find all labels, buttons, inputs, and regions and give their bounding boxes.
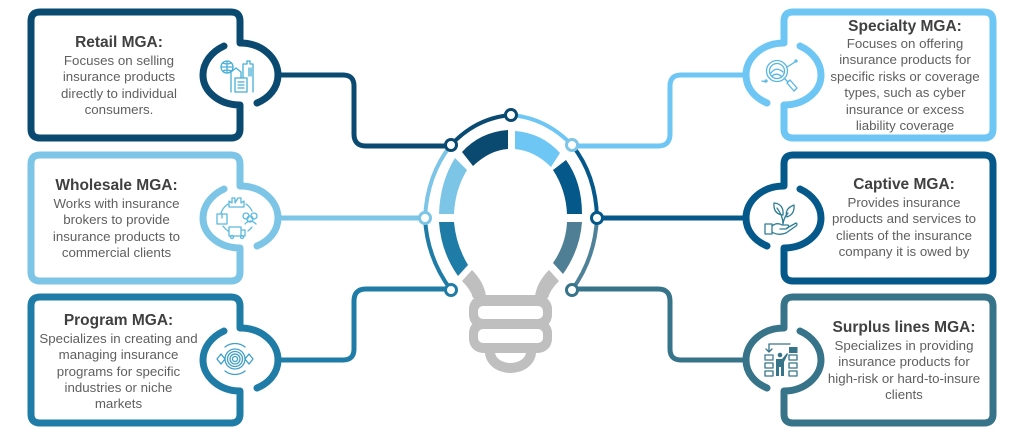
text: Specialty description: types, such as cyber — [844, 85, 966, 100]
text: Retail description: consumers. — [85, 102, 153, 117]
text: Specialty description: insurance products for — [839, 52, 971, 67]
text: Program description: industries or niche — [65, 380, 172, 395]
panel: Retail MGA — [31, 12, 278, 138]
panel: Wholesale MGA — [31, 155, 278, 281]
arrow: Program connector — [281, 289, 447, 360]
text: Wholesale description: insurance products to — [53, 229, 180, 244]
text: Specialty description: insurance or excess — [846, 102, 964, 117]
text: Surplus lines description: Specializes in providing — [835, 338, 973, 353]
arrow: Retail connector — [281, 75, 447, 146]
text: Captive description: Provides insurance — [847, 195, 961, 210]
arrow: Surplus lines connector — [577, 289, 743, 360]
panel: Program MGA — [31, 297, 278, 423]
text: Program description: programs for specific — [57, 364, 181, 379]
text: Wholesale description — [53, 196, 180, 260]
text: Program description: managing insurance — [59, 347, 178, 362]
text: Captive description: company it is owed by — [839, 244, 970, 259]
card outline: Retail — [31, 12, 278, 138]
icon: person arranging boxes — [765, 344, 798, 376]
text: Captive description: clients of the insurance — [836, 228, 972, 243]
text: Surplus lines description: clients — [885, 387, 923, 402]
heading: Captive MGA: Captive MGA: — [853, 176, 955, 193]
card outline: Surplus lines — [746, 297, 993, 423]
arrow: Specialty connector — [577, 75, 743, 146]
bulb inner segments — [439, 130, 582, 276]
icon: magnifier with trend — [762, 60, 797, 91]
heading: Surplus lines MGA: Surplus lines MGA: — [833, 319, 975, 336]
text: Captive description: products and services to — [832, 211, 976, 226]
icon: hand holding a plant — [765, 203, 797, 234]
text: Specialty description — [830, 36, 980, 133]
text: Wholesale description: brokers to provide — [63, 212, 170, 227]
bulb base — [462, 270, 559, 373]
panel: Captive MGA — [746, 155, 993, 281]
text: Wholesale description: Works with insurance — [53, 196, 180, 211]
text: Program description: Specializes in creating and — [39, 331, 198, 346]
card outline: Wholesale — [31, 155, 278, 281]
panel: Specialty MGA — [746, 12, 993, 138]
text: Retail description: Focuses on selling — [64, 53, 174, 68]
text: Retail description: directly to individual — [61, 86, 177, 101]
arrow: Captive connector — [601, 216, 743, 220]
heading: Wholesale MGA: Wholesale MGA: — [55, 177, 178, 194]
text: Captive description — [832, 195, 976, 259]
arrow: Wholesale connector — [281, 216, 423, 220]
text: Surplus lines description: high-risk or hard-to-insure — [828, 371, 980, 386]
text: Specialty description: liability coverage — [856, 118, 954, 133]
heading: Retail MGA: Retail MGA: — [75, 34, 163, 51]
heading: Program MGA: Program MGA: — [64, 312, 173, 329]
lightbulb — [420, 110, 602, 373]
text: Retail description — [61, 53, 177, 117]
icon: supply cycle — [217, 198, 257, 238]
icon: concentric target — [217, 343, 253, 375]
bulb outline ring — [425, 115, 597, 290]
text: Specialty description: Focuses on offering — [847, 36, 963, 51]
ring nodes — [420, 110, 602, 296]
heading: Specialty MGA: Specialty MGA: — [848, 18, 962, 35]
card outline: Captive — [746, 155, 993, 281]
card outline: Program — [31, 297, 278, 423]
panel: Surplus lines MGA — [746, 297, 993, 423]
text: Specialty description: specific risks or coverage — [830, 69, 980, 84]
text: Program description: markets — [95, 396, 142, 411]
text: Wholesale description: commercial clients — [62, 245, 172, 260]
text: Program description — [39, 331, 198, 411]
text: Retail description: insurance products — [63, 69, 176, 84]
text: Surplus lines description — [828, 338, 980, 402]
card outline: Specialty — [746, 12, 993, 138]
text: Surplus lines description: insurance products for — [838, 354, 970, 369]
icon: buildings and globe — [221, 61, 253, 92]
